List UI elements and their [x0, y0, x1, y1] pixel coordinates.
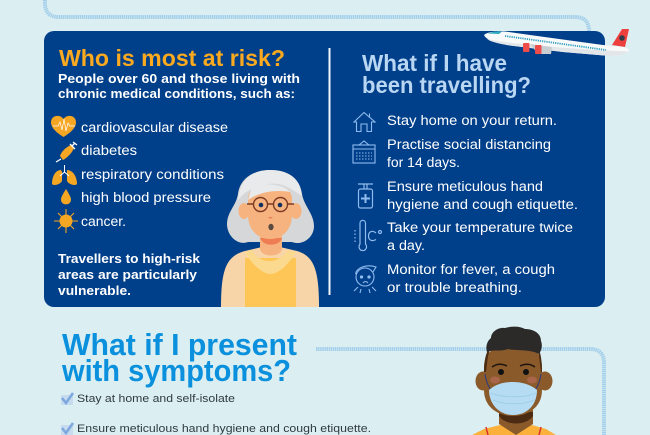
icon: thermometer — [355, 220, 382, 251]
text block: conditions list: cardiovascular disease — [81, 120, 228, 135]
icon: heart — [51, 116, 76, 137]
text block: travel advice: Practise social distancing — [387, 137, 551, 152]
text block: travellers note: areas are particularly — [58, 268, 197, 282]
text block: conditions list: high blood pressure — [81, 190, 211, 205]
text block: travellers note — [58, 252, 200, 298]
text block: travel advice: for 14 days. — [387, 155, 460, 170]
text: hygiene: Ensure meticulous hand hygiene and cough etiquette. — [77, 423, 371, 435]
icon: hand sanitiser — [358, 184, 373, 208]
text block: conditions list: diabetes — [81, 143, 137, 158]
icon: lungs — [52, 165, 77, 185]
text block: travel advice — [387, 113, 578, 295]
icon: calendar — [353, 141, 375, 163]
icon: check two — [61, 423, 73, 435]
text block: travel advice: a day. — [387, 238, 425, 253]
heading: what if I present with symptoms — [61, 328, 297, 388]
text block: travel advice: Monitor for fever, a cough — [387, 262, 555, 277]
text block: conditions list: respiratory conditions — [81, 167, 224, 182]
text block: risk intro: chronic medical conditions, such as: — [58, 87, 295, 101]
text block: travellers note: Travellers to high-risk — [58, 252, 200, 266]
text block: travel advice: Stay home on your return. — [387, 113, 557, 128]
text block: risk intro: People over 60 and those living with — [58, 72, 300, 86]
text block: travel advice: Take your temperature twice — [387, 220, 573, 235]
panel: risk and travel — [44, 31, 605, 307]
text block: travel advice: hygiene and cough etiquette. — [387, 197, 578, 212]
text block: travel advice: Ensure meticulous hand — [387, 179, 543, 194]
icon: check one — [61, 393, 73, 405]
heading: what if I have been travelling: been travelling? — [362, 72, 531, 98]
illustration: elderly woman — [221, 170, 319, 307]
text: self-isolate: Stay at home and self-isolate — [77, 393, 235, 405]
heading: what if I present with symptoms: with symptoms? — [61, 354, 291, 388]
icon: cancer cell — [54, 209, 78, 233]
text block: conditions list — [81, 120, 228, 229]
heading: what if I have been travelling: What if I have — [362, 50, 507, 76]
icon: house — [354, 112, 375, 132]
icon: sick face — [354, 266, 376, 293]
heading: who is most at risk: Who is most at risk? — [59, 45, 285, 71]
illustration: plane — [484, 29, 629, 56]
heading: what if I present with symptoms: What if I present — [62, 328, 297, 362]
text block: travel advice: or trouble breathing. — [387, 280, 522, 295]
heading: what if I have been travelling — [362, 50, 531, 98]
illustration: man in mask — [472, 327, 556, 435]
text block: risk intro — [58, 72, 300, 101]
text block: travellers note: vulnerable. — [58, 284, 131, 298]
icon: blood drop — [61, 189, 71, 204]
icon: syringe — [56, 142, 77, 162]
text block: conditions list: cancer. — [81, 214, 126, 229]
